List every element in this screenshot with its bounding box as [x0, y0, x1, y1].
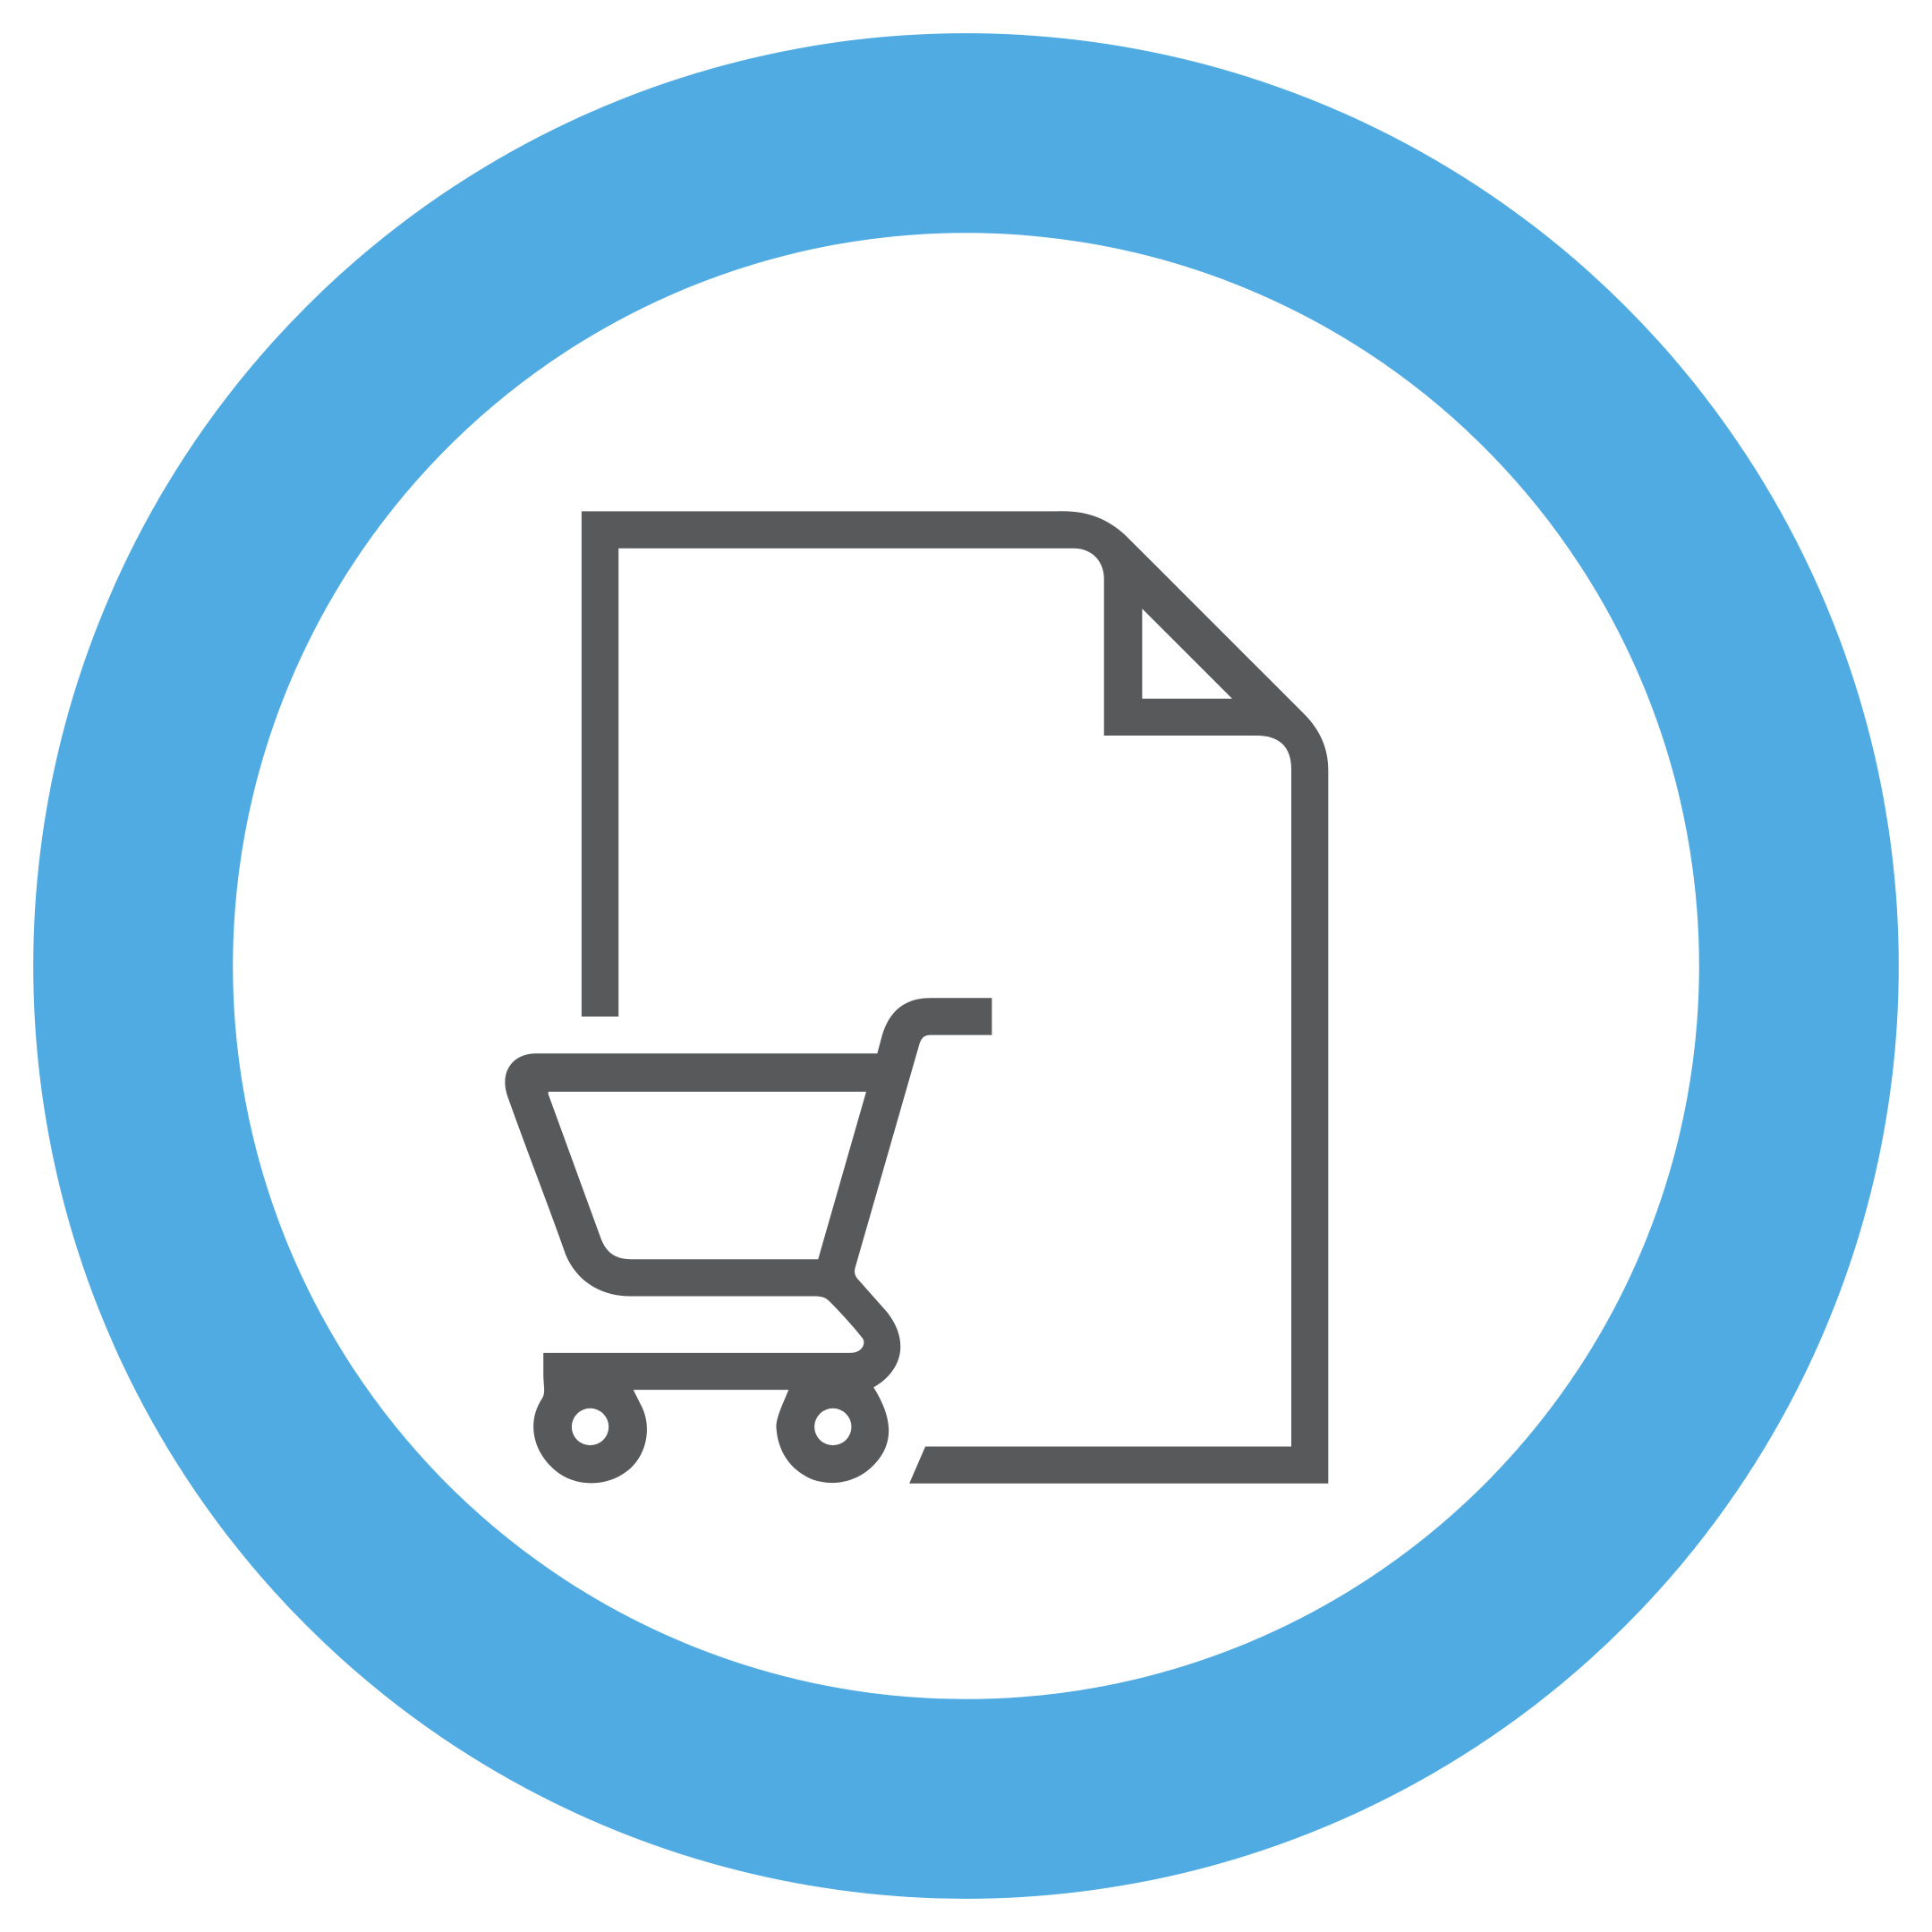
- blue ring: [133, 133, 1799, 1799]
- icon: document with folded corner: [582, 511, 1328, 1484]
- icon: shopping cart: [505, 998, 992, 1483]
